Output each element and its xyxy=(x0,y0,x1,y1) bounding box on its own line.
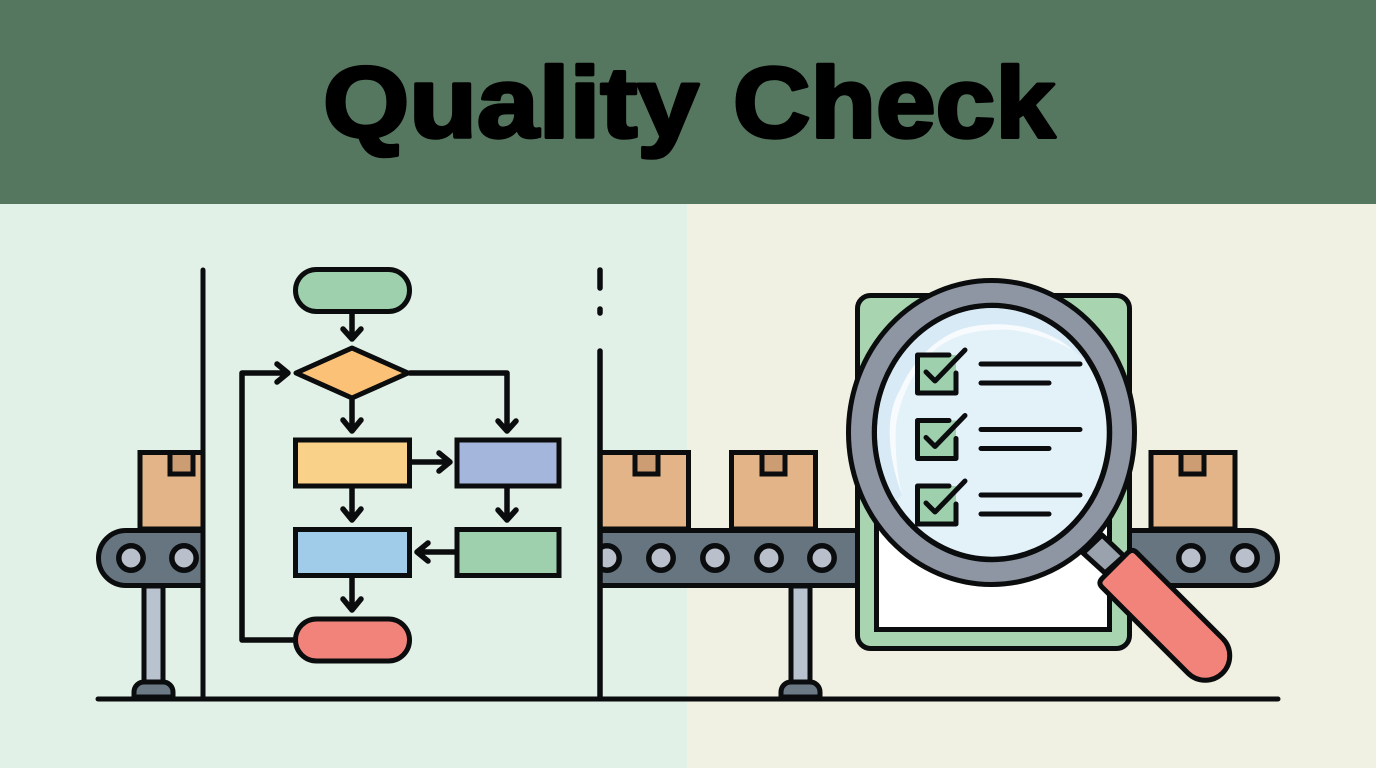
box 2 xyxy=(600,452,688,529)
ring xyxy=(848,280,1134,584)
clipboard xyxy=(858,296,1130,648)
step blue xyxy=(296,530,410,576)
header band xyxy=(0,0,1376,204)
neck xyxy=(1083,535,1124,573)
checklist row 1 xyxy=(917,350,1080,393)
checklist row 2 xyxy=(917,416,1080,458)
checklist xyxy=(917,350,1080,524)
magnifying glass xyxy=(848,280,1240,690)
right divider xyxy=(597,270,603,698)
step yellow xyxy=(296,440,410,486)
connectors and arrows xyxy=(242,314,516,640)
left box xyxy=(140,452,203,529)
left stand xyxy=(134,586,173,697)
left panel background xyxy=(0,204,687,768)
flowchart xyxy=(242,270,559,661)
lens highlight xyxy=(877,308,1086,501)
conveyor: left section xyxy=(98,452,203,697)
conveyor: middle and right section xyxy=(595,452,1278,697)
left divider xyxy=(200,270,206,698)
belt center xyxy=(595,530,870,586)
decision diamond xyxy=(296,348,408,398)
right panel background xyxy=(687,204,1376,768)
ground line xyxy=(98,696,1278,702)
checklist row 3 xyxy=(917,481,1080,524)
lens xyxy=(874,306,1110,560)
handle xyxy=(1098,548,1240,690)
title: Check xyxy=(733,47,1055,159)
step purple xyxy=(457,440,559,486)
paper sheet xyxy=(876,480,1110,630)
title xyxy=(323,47,1055,159)
box 3 xyxy=(732,452,816,529)
step green xyxy=(457,530,559,576)
left belt xyxy=(98,530,203,586)
center stand xyxy=(781,586,820,697)
title: Quality xyxy=(323,47,699,159)
box 4 xyxy=(1151,452,1235,529)
start pill xyxy=(296,270,410,312)
end pill xyxy=(296,619,410,661)
belt right xyxy=(1120,530,1278,586)
